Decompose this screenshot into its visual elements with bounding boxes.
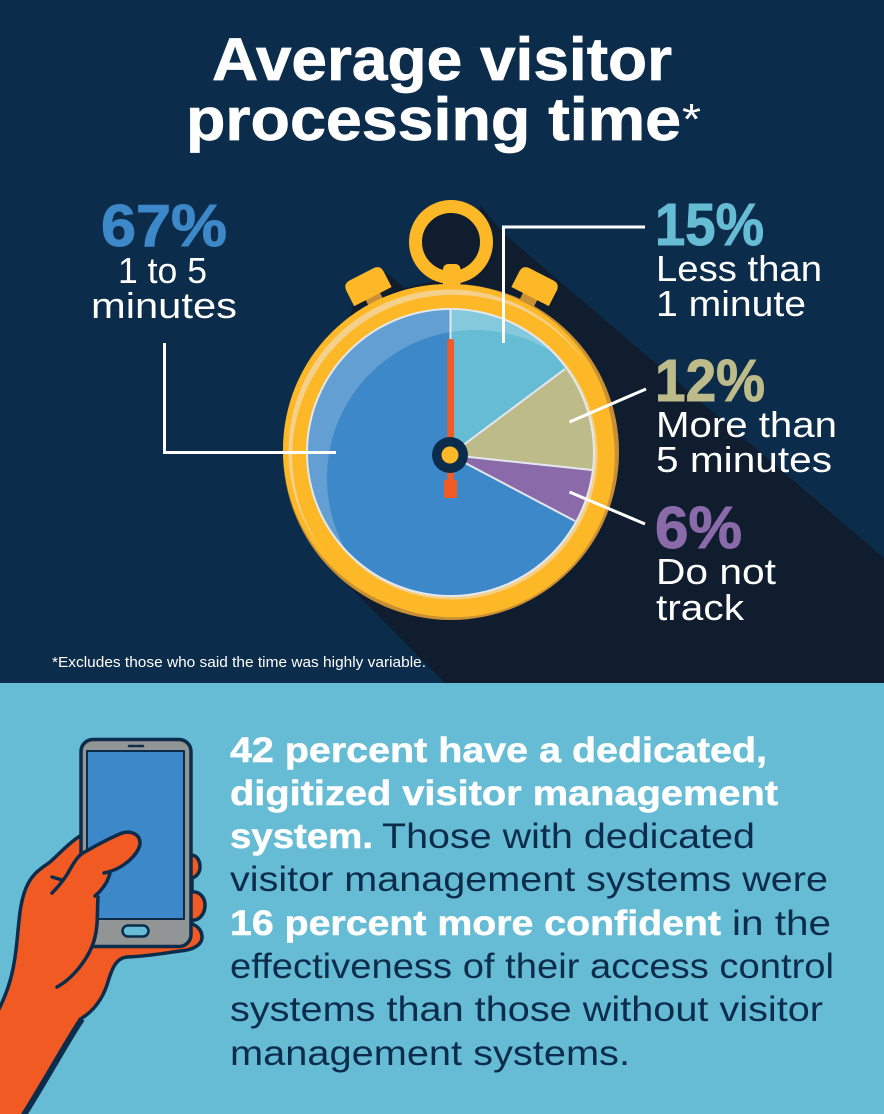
wrist shadow stroke — [22, 1019, 82, 1114]
connector lines — [164, 227, 646, 524]
panel: bottom light blue background — [0, 683, 884, 1114]
stopwatch — [283, 200, 619, 620]
body text: in the — [732, 903, 831, 943]
body text — [230, 730, 834, 1073]
phone — [81, 740, 191, 946]
body text: visitor management systems were — [230, 859, 828, 899]
slice: 12% more than 5 minutes — [465, 368, 593, 470]
label: 6% do not track — [655, 495, 776, 628]
icon: right side button — [502, 265, 560, 324]
label: 67% 1 to 5 minutes — [91, 193, 237, 326]
label: 12% more than 5 minutes — [655, 348, 837, 480]
title — [186, 26, 701, 153]
body text: system. — [230, 816, 373, 856]
slice: 15% less than 1 minute — [452, 310, 566, 444]
body text: digitized visitor management — [230, 773, 778, 813]
body text: effectiveness of their access control — [230, 946, 834, 986]
label: 67% 1 to 5 minutes: minutes — [91, 285, 237, 326]
label: 15% less than 1 minute: 1 minute — [656, 283, 806, 324]
label: 15% less than 1 minute: Less than — [656, 248, 822, 289]
body text: 16 percent more confident — [230, 903, 721, 943]
label: 12% more than 5 minutes: More than — [656, 404, 837, 445]
slice: 67% 1 to 5 minutes — [308, 310, 576, 595]
label: 12% more than 5 minutes: 12% — [655, 348, 765, 414]
body text: 42 percent have a dedicated, — [230, 730, 767, 770]
long shadow of stopwatch — [300, 205, 884, 683]
label: 6% do not track: track — [656, 587, 745, 628]
pie chart face — [306, 308, 595, 597]
icon: crown ring — [416, 206, 486, 290]
panel: top navy background — [0, 0, 884, 683]
thumb — [30, 832, 140, 987]
label: 67% 1 to 5 minutes: 1 to 5 — [118, 250, 207, 291]
slice: 6% do not track — [466, 458, 592, 522]
title: processing time — [186, 86, 681, 153]
label: 67% 1 to 5 minutes: 67% — [101, 193, 227, 259]
body text: systems than those without visitor — [230, 989, 823, 1029]
label: 6% do not track: Do not — [656, 551, 776, 592]
label: 15% less than 1 minute — [655, 192, 822, 324]
stopwatch hand — [432, 339, 468, 498]
label: 15% less than 1 minute: 15% — [655, 192, 764, 258]
label: 6% do not track: 6% — [655, 495, 742, 561]
title: Average visitor — [212, 26, 672, 93]
body text: Those with dedicated — [382, 816, 755, 856]
body text: management systems. — [230, 1033, 630, 1073]
title: * — [682, 95, 701, 144]
icon: hand holding phone — [0, 740, 205, 1114]
hand base — [0, 836, 205, 1114]
icon: left side button — [343, 265, 401, 324]
label: 12% more than 5 minutes: 5 minutes — [656, 439, 832, 480]
footnote: *Excludes those who said the time was highly variable. — [52, 655, 426, 671]
stopwatch bezel — [283, 284, 619, 620]
glass highlight — [308, 310, 549, 547]
